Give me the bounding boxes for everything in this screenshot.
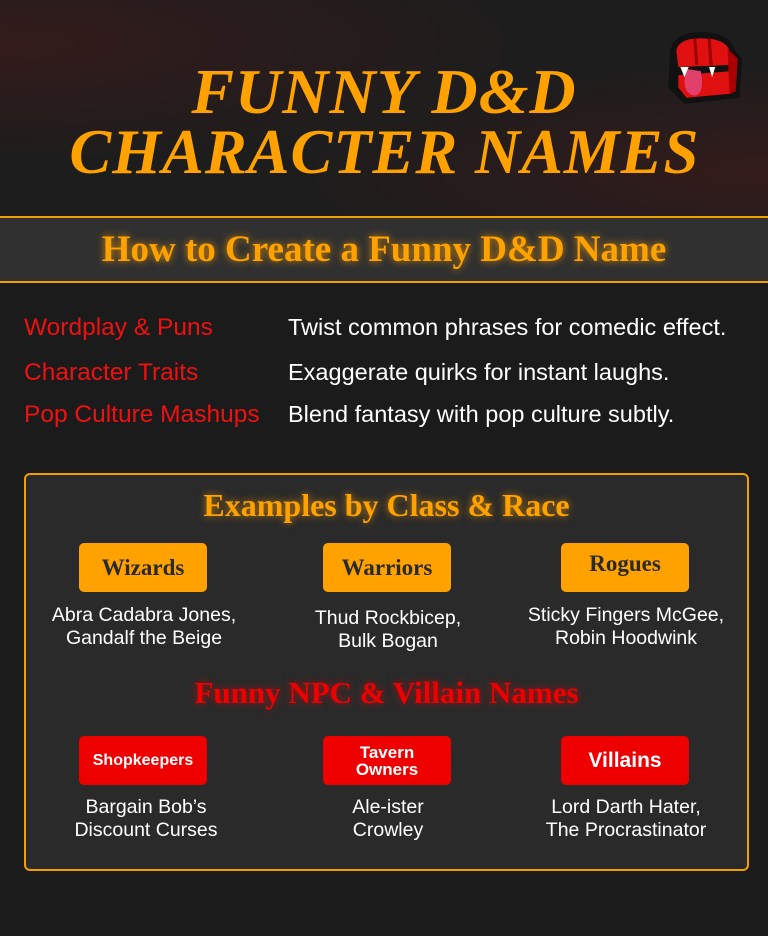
card: villains: The Procrastinator [546, 819, 706, 841]
card: villains: Villains [588, 748, 662, 772]
card: shopkeepers: Shopkeepers [93, 752, 193, 768]
card: tavern owners: Ale-ister [352, 796, 424, 818]
card: wizards: Wizards [102, 554, 184, 580]
card: warriors: Warriors [342, 554, 432, 580]
card: wizards: Gandalf the Beige [66, 627, 222, 649]
card: rogues [528, 543, 724, 649]
tip row: pop culture [24, 401, 674, 428]
band: how to create: How to Create a Funny D&D Name [102, 229, 666, 270]
heading: examples by class: Examples by Class & Race [203, 487, 570, 523]
card: rogues: Sticky Fingers McGee, [528, 604, 724, 626]
card: tavern owners: Crowley [353, 819, 423, 841]
icon: mimic chest [668, 32, 742, 104]
card: villains [546, 736, 706, 841]
card: rogues: Rogues [589, 551, 661, 576]
card: tavern owners: Tavern [360, 742, 414, 762]
tip row: traits: Character Traits [24, 359, 198, 386]
tip row: wordplay: Wordplay & Puns [24, 314, 213, 341]
card: warriors: Thud Rockbicep, [315, 607, 461, 629]
heading: npc villain: Funny NPC & Villain Names [194, 675, 579, 710]
title: CHARACTER NAMES [69, 116, 699, 187]
card: shopkeepers: Bargain Bob’s [85, 796, 207, 818]
card: wizards: Abra Cadabra Jones, [52, 604, 236, 626]
band: how to create [0, 216, 768, 283]
card: rogues: Robin Hoodwink [555, 627, 697, 649]
tip row: wordplay [24, 314, 726, 341]
panel: examples [24, 473, 749, 871]
card: warriors [315, 543, 461, 652]
tip row: traits [24, 359, 669, 386]
card: wizards [52, 543, 236, 649]
background pattern [0, 0, 768, 216]
card: warriors: Bulk Bogan [338, 630, 438, 652]
tip row: pop culture: Pop Culture Mashups [24, 401, 260, 428]
tip row: traits: Exaggerate quirks for instant laughs. [288, 359, 669, 385]
tip row: pop culture: Blend fantasy with pop culture subtly. [288, 401, 674, 427]
card: shopkeepers: Discount Curses [74, 819, 218, 841]
tip row: wordplay: Twist common phrases for comedic effect. [288, 314, 726, 340]
card: tavern owners [323, 736, 451, 841]
title [69, 56, 699, 187]
card: shopkeepers [74, 736, 218, 841]
card: tavern owners: Owners [356, 760, 418, 778]
title: FUNNY D&D [191, 56, 577, 127]
card: villains: Lord Darth Hater, [551, 796, 701, 818]
